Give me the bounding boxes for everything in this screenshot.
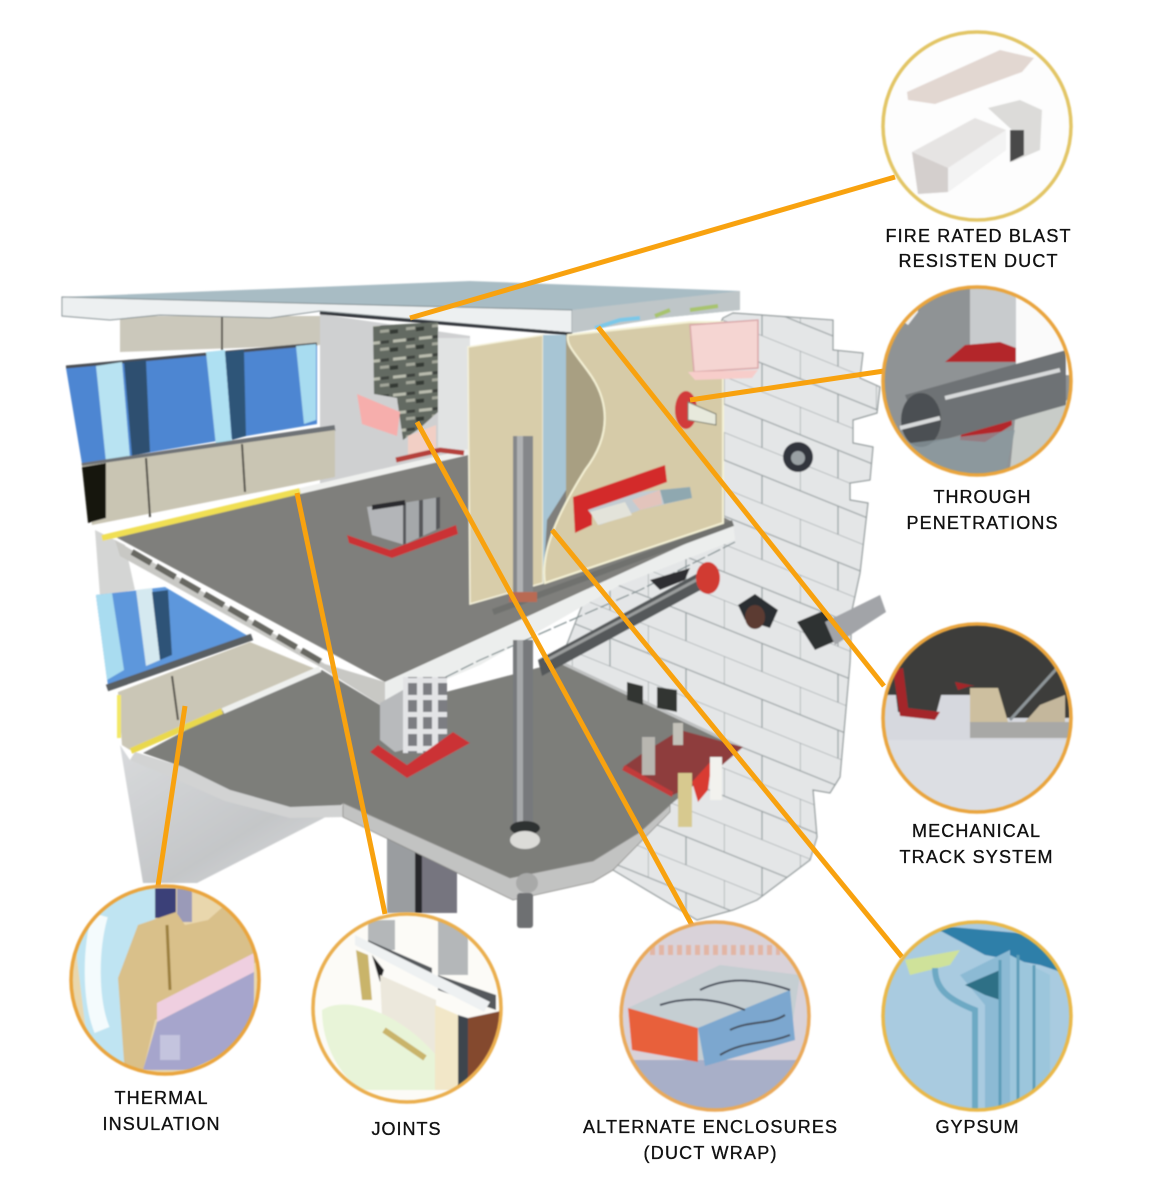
leader: thermal insulation bbox=[158, 706, 185, 886]
detail circle: mechanical track system bbox=[880, 620, 1075, 815]
leader: joints bbox=[297, 493, 385, 914]
upper windows bbox=[66, 344, 335, 466]
detail circle: fire rated duct bbox=[880, 30, 1075, 225]
blue stud bbox=[543, 335, 566, 585]
label: thermal insulation: THERMAL bbox=[114, 1088, 208, 1108]
label: fire rated blast resisten duct: FIRE RATED BLAST bbox=[886, 226, 1070, 246]
label: fire rated blast resisten duct bbox=[886, 226, 1070, 271]
leader: gypsum bbox=[552, 530, 902, 957]
upper floor firestop rack bbox=[347, 497, 458, 558]
duct red base bbox=[396, 425, 464, 460]
detail circle: gypsum bbox=[880, 920, 1075, 1115]
lower windows bbox=[96, 587, 252, 688]
vertical pipe bbox=[509, 436, 540, 928]
upper duct mesh bbox=[373, 322, 438, 440]
right partition panel bbox=[544, 322, 723, 583]
label: through penetrations: THROUGH bbox=[934, 487, 1030, 507]
under-floor wall strip bbox=[95, 530, 135, 596]
label: alternate enclosures bbox=[583, 1117, 837, 1163]
detail circle: joints bbox=[310, 912, 505, 1107]
label: through penetrations: PENETRATIONS bbox=[906, 513, 1058, 533]
label: alternate enclosures: (DUCT WRAP) bbox=[644, 1143, 776, 1163]
floor penetration assembly bbox=[622, 682, 743, 827]
building cutaway illustration bbox=[62, 281, 886, 928]
through-wall sleeve penetration bbox=[675, 391, 716, 429]
floor 1 slab bbox=[102, 452, 735, 708]
leader: mechanical track bbox=[598, 327, 884, 686]
label: through penetrations bbox=[906, 487, 1058, 533]
label: mechanical track system: TRACK SYSTEM bbox=[900, 847, 1052, 867]
leader: fire rated duct bbox=[410, 177, 895, 318]
interior back wall bbox=[320, 314, 470, 494]
lower stud column bbox=[387, 835, 457, 913]
wall opening bbox=[783, 442, 813, 472]
pink duct end bbox=[357, 394, 400, 436]
left partition panel bbox=[468, 335, 543, 604]
cable tray firestop bbox=[573, 465, 692, 533]
label: gypsum: GYPSUM bbox=[936, 1117, 1018, 1137]
wall pipes bbox=[738, 594, 886, 650]
roof slab bbox=[62, 281, 740, 334]
label: thermal insulation: INSULATION bbox=[102, 1114, 220, 1134]
horizontal pipe bbox=[538, 562, 720, 676]
leader: duct wrap bbox=[417, 422, 693, 927]
lower spandrel insulation bbox=[118, 642, 318, 750]
detail circle: alternate enclosures bbox=[618, 920, 813, 1115]
detail circle: through penetrations bbox=[880, 285, 1076, 480]
label: alternate enclosures: ALTERNATE ENCLOSURES bbox=[583, 1117, 837, 1137]
label: mechanical track system bbox=[900, 821, 1052, 867]
floor 2 slab bbox=[130, 662, 740, 900]
leader lines bbox=[158, 177, 902, 957]
label: fire rated blast resisten duct: RESISTEN DUCT bbox=[898, 251, 1058, 271]
brick wall bbox=[545, 313, 880, 920]
lower floor firestop rack bbox=[370, 677, 470, 778]
leader: through penetrations bbox=[690, 371, 884, 400]
underside wall bbox=[120, 745, 342, 883]
label: joints: JOINTS bbox=[372, 1119, 440, 1139]
back wall bricks bbox=[438, 338, 470, 453]
upper pink duct bbox=[688, 320, 758, 380]
label: thermal insulation bbox=[102, 1088, 220, 1134]
label: mechanical track system: MECHANICAL bbox=[912, 821, 1040, 841]
detail circle: thermal insulation bbox=[68, 885, 263, 1080]
upper masonry panels bbox=[120, 316, 320, 352]
upper spandrel insulation bbox=[82, 430, 335, 525]
